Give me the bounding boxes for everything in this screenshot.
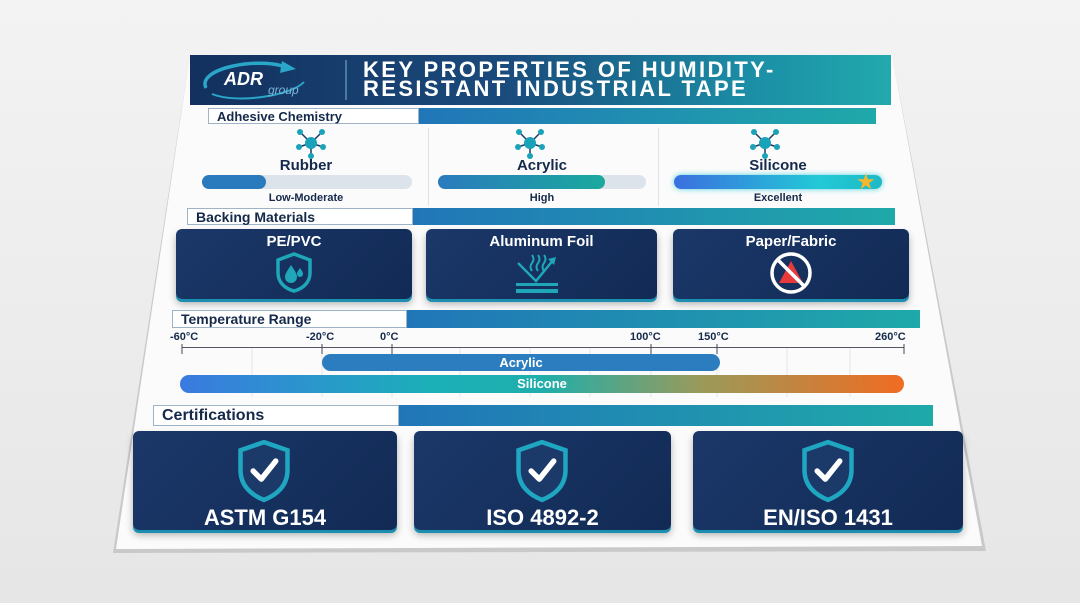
section: Temperature Range: Temperature Range xyxy=(181,311,311,327)
logo: ADR group xyxy=(203,61,305,100)
silicone rating: Excellent xyxy=(754,192,802,204)
temperature axis: -20°C xyxy=(306,331,334,343)
card: ISO 4892-2: ISO 4892-2 xyxy=(486,505,599,530)
title: KEY PROPERTIES OF HUMIDITY- xyxy=(363,57,776,82)
temperature axis: 150°C xyxy=(698,331,729,343)
header banner xyxy=(190,55,891,105)
temperature axis: -60°C xyxy=(170,331,198,343)
section: Adhesive Chemistry: Adhesive Chemistry xyxy=(217,108,342,124)
section: Backing Materials: Backing Materials xyxy=(196,208,315,224)
section: Certifications: Certifications xyxy=(162,406,264,424)
logo: ADR group: group xyxy=(268,83,299,97)
card: Aluminum Foil xyxy=(426,229,657,299)
icon: molecule silicone xyxy=(750,129,780,159)
card: EN/ISO 1431 xyxy=(693,431,963,530)
card: EN/ISO 1431: EN/ISO 1431 xyxy=(763,505,893,530)
temperature axis: 0°C xyxy=(380,331,398,343)
acrylic rating xyxy=(438,157,646,204)
icon: molecule acrylic xyxy=(515,129,545,159)
title xyxy=(345,60,776,100)
card: ISO 4892-2 xyxy=(414,431,671,530)
temperature axis: 260°C xyxy=(875,331,906,343)
card: Paper/Fabric: Paper/Fabric xyxy=(746,233,836,250)
temperature axis: 100°C xyxy=(630,331,661,343)
section: Adhesive Chemistry xyxy=(208,108,876,124)
card: ASTM G154: ASTM G154 xyxy=(204,505,326,530)
poster background xyxy=(116,55,982,549)
rubber rating: Rubber xyxy=(280,157,332,174)
icon: molecule rubber xyxy=(296,129,326,159)
section: Temperature Range xyxy=(172,310,920,328)
section: Backing Materials xyxy=(187,208,895,225)
card: ASTM G154 xyxy=(133,431,397,530)
logo: ADR group: ADR xyxy=(223,69,263,89)
rubber rating: Low-Moderate xyxy=(269,192,343,204)
card: PE/PVC: PE/PVC xyxy=(266,233,322,250)
temperature axis xyxy=(170,331,906,397)
section: Certifications xyxy=(153,405,933,426)
silicone rating: Silicone xyxy=(749,157,807,174)
card: Aluminum Foil: Aluminum Foil xyxy=(489,233,594,250)
rubber rating xyxy=(202,157,412,204)
card: PE/PVC xyxy=(176,229,412,299)
card: Paper/Fabric xyxy=(673,229,909,299)
bar: Acrylic range: Acrylic xyxy=(499,355,543,370)
acrylic rating: High xyxy=(530,192,554,204)
acrylic rating: Acrylic xyxy=(517,157,567,174)
bar: Acrylic range xyxy=(322,354,720,371)
silicone rating xyxy=(670,157,886,204)
bar: Silicone range: Silicone xyxy=(517,376,567,391)
bar: Silicone range xyxy=(180,375,904,393)
title: RESISTANT INDUSTRIAL TAPE xyxy=(363,76,748,101)
silicone rating: ★ xyxy=(856,169,876,194)
